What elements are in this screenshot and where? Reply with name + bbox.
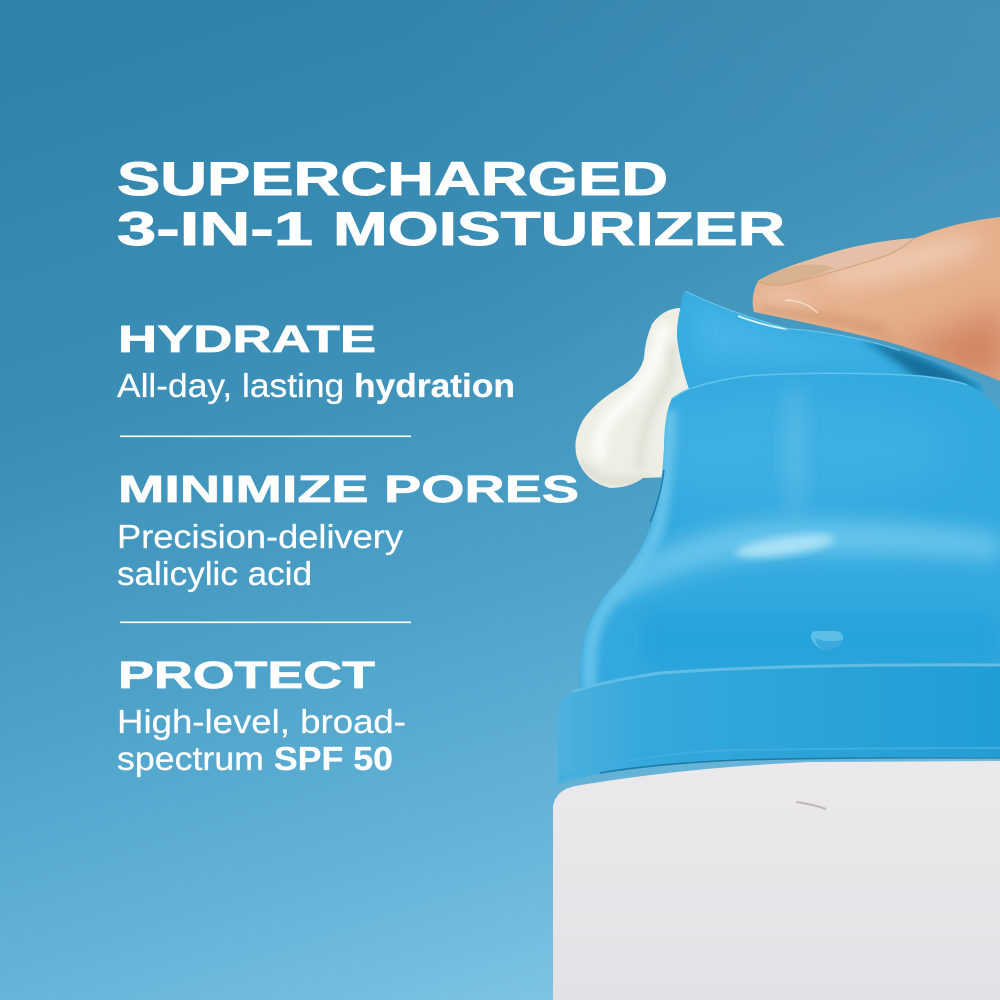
heading: minimize pores: MINIMIZE PORES	[118, 469, 579, 511]
right lower shade	[640, 610, 1000, 670]
cream dollop	[575, 308, 689, 488]
title: MOISTURIZER	[333, 202, 785, 255]
finger	[752, 217, 1000, 381]
pump head highlight	[738, 316, 787, 329]
heading: protect: PROTECT	[118, 655, 375, 697]
neck dark edge	[650, 470, 664, 522]
pump body	[570, 365, 1000, 705]
text: protect description: spectrum SPF 50	[117, 740, 384, 777]
collar shadow	[600, 758, 1000, 773]
fingernail edge line	[757, 236, 916, 285]
collar lower lip	[560, 748, 1000, 778]
pump head top edge light	[686, 291, 900, 350]
skin crease	[785, 300, 818, 313]
left neck light	[589, 410, 670, 690]
text: minimize pores description: salicylic acid	[117, 555, 312, 592]
heading: hydrate: HYDRATE	[118, 319, 376, 361]
section: protect	[117, 655, 406, 777]
collar	[557, 665, 1000, 786]
pump body dimple	[811, 631, 843, 650]
section: hydrate	[117, 319, 515, 404]
title	[117, 152, 785, 255]
fingernail	[758, 238, 914, 282]
text: hydrate description: All-day, lasting hydration	[117, 367, 515, 404]
collar rim highlight	[572, 665, 1000, 692]
pump head	[677, 291, 985, 392]
product photo: bottle with pump and finger	[553, 210, 1000, 1000]
title: 3-IN-1	[117, 202, 313, 255]
pump body rim highlight	[672, 372, 967, 398]
text: minimize pores description: Precision-delivery	[117, 518, 404, 555]
bottle mark	[796, 802, 826, 809]
text: protect description: High-level, broad-	[117, 703, 406, 740]
pump body shine	[734, 530, 836, 562]
title: SUPERCHARGED	[117, 152, 668, 205]
pump body streak	[783, 380, 807, 520]
pump body shine band	[600, 520, 1000, 600]
section: minimize pores	[117, 469, 579, 592]
bottle white body	[553, 761, 1000, 1000]
